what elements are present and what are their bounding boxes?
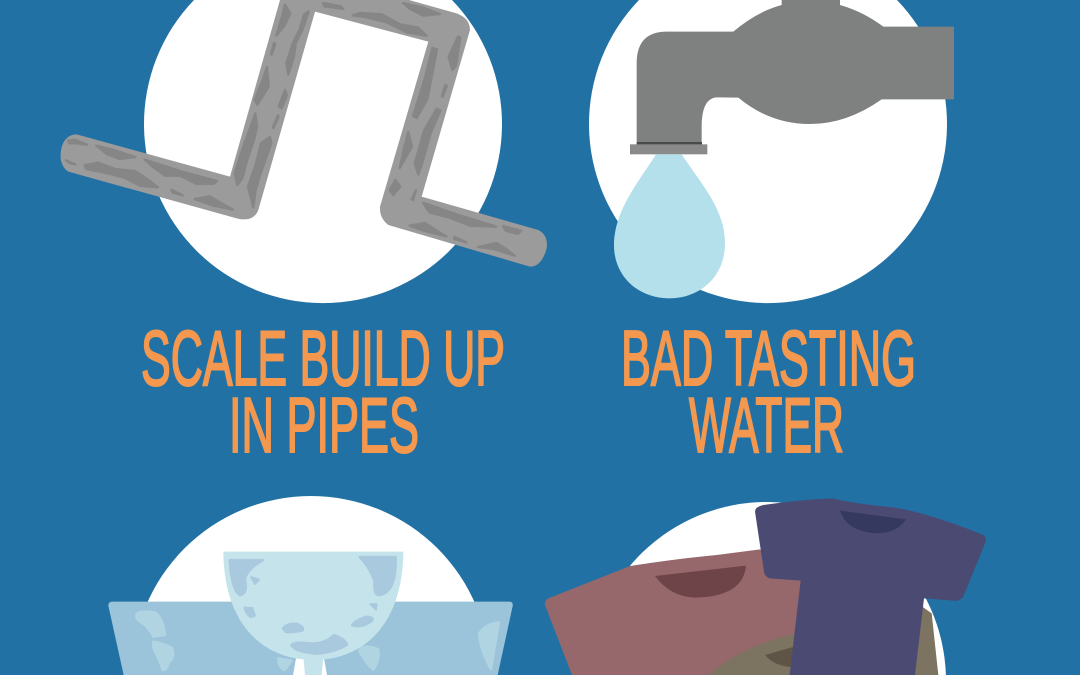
icon: scale build up in pipes bbox=[61, 0, 547, 303]
heading: scale build up in pipes bbox=[141, 314, 505, 469]
heading: bad tasting water bbox=[621, 314, 916, 469]
icon: faucet with bad tasting water bbox=[589, 0, 954, 303]
heading: scale build up in pipes: SCALE BUILD UP bbox=[141, 314, 505, 402]
navy shirt bbox=[755, 498, 986, 675]
icon: dingy laundry shirts bbox=[545, 498, 986, 675]
heading: scale build up in pipes: IN PIPES bbox=[229, 381, 419, 469]
icon: spotted glassware bbox=[108, 496, 513, 675]
mauve shirt bbox=[545, 549, 810, 675]
brown shirt bbox=[708, 605, 938, 675]
heading: bad tasting water: WATER bbox=[689, 381, 844, 469]
